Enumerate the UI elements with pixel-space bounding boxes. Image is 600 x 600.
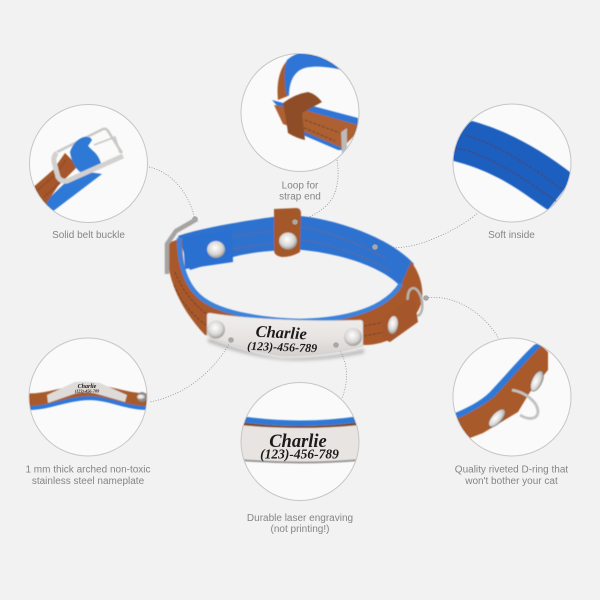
nameplate shadow [208,338,364,360]
caption: nameplate: stainless steel nameplate [32,476,145,487]
detail circle [29,338,147,456]
circle outline [30,104,148,222]
panel: laser engraving [240,382,360,500]
D-ring photo [456,344,549,438]
caption: solid belt buckle: Solid belt buckle [52,230,125,241]
circle outline [29,338,147,456]
tab rivet [387,315,399,335]
belt buckle [167,219,197,274]
detail circle [241,54,359,172]
front strap: brown leather [167,238,422,345]
panel: riveted D-ring [448,338,571,456]
main collar photo [167,208,424,360]
back strap: blue inner band [178,216,414,286]
front strap: blue rim [179,238,401,321]
engraved phone: (123)-456-789 [260,446,339,462]
nameplate left rivet [207,320,225,338]
buckle photo [30,129,123,212]
circle outline [453,338,571,456]
leather loop [274,208,301,257]
panel: solid belt buckle [30,104,148,222]
circle outline [241,54,359,172]
nameplate phone: (123)-456-789 [247,339,317,355]
caption: laser engraving: (not printing!) [271,524,329,535]
caption: nameplate: 1 mm thick arched non-toxic [25,464,151,476]
rivet on strap end [207,241,225,258]
blue suede photo [450,121,575,210]
loop rivet [279,232,297,250]
tiny name: Charlie [78,384,97,390]
rivet tab [382,298,418,342]
arched nameplate photo [28,382,148,408]
leader dots [192,216,429,348]
engraved name: Charlie [269,432,327,452]
caption: D-ring: Quality riveted D-ring that [455,464,568,476]
detail circle [241,382,359,500]
caption: laser engraving: Durable laser engraving [247,513,353,524]
front strap stitching [174,272,385,336]
blue strap end [183,230,233,269]
panel: loop for strap end [241,50,359,172]
engraved plate photo [240,416,360,464]
caption: D-ring: won't bother your cat [464,476,558,487]
panel: soft inside [450,104,575,222]
caption: loop for strap end: Loop for [282,180,318,192]
detail circle [453,338,571,456]
D-ring [406,287,424,317]
nameplate [207,313,363,356]
circle outline [241,382,359,500]
loop photo [272,50,358,156]
detail circle [30,104,148,222]
tiny phone: (123)-456-789 [75,388,100,394]
caption: soft inside: Soft inside [488,230,535,241]
nameplate name: Charlie [255,322,307,343]
back strap stitching [233,227,392,272]
panel: nameplate side view [28,338,148,456]
nameplate right rivet [344,328,362,346]
circle outline [453,104,571,222]
leader lines [149,160,499,402]
detail circle [453,104,571,222]
caption: loop for strap end: strap end [279,192,321,202]
